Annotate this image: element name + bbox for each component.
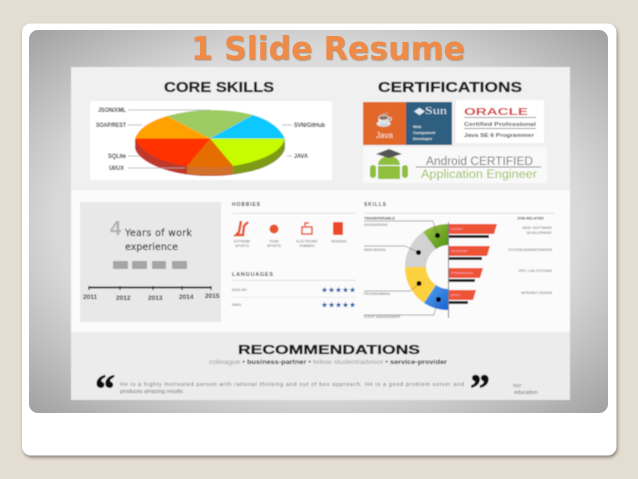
quote text: He is a highly motivated person with rational thinking and out of box approach. He is a good problem solver and bbox=[120, 382, 464, 388]
panel: experience bbox=[80, 202, 221, 322]
heading: skills: SKILLS bbox=[364, 202, 387, 208]
top section background bbox=[71, 67, 570, 190]
panel: skills: JOB-RELATED bbox=[517, 216, 544, 220]
badge: oracle: Certified Professional bbox=[464, 122, 537, 128]
bar chart: EXPERT bbox=[451, 227, 463, 231]
heading: languages: LANGUAGES bbox=[232, 272, 273, 278]
badge: android: Application Engineer bbox=[421, 169, 537, 181]
pie labels: SVN/GitHub bbox=[294, 123, 325, 129]
skill labels left: PROGRAMMING bbox=[364, 292, 391, 296]
heading: certifications: CERTIFICATIONS bbox=[378, 80, 522, 96]
quote text: produces amazing results. bbox=[120, 389, 185, 395]
attribution bbox=[513, 383, 538, 396]
pie labels: SQLite bbox=[108, 154, 127, 160]
bar chart: INTERMEDIATE bbox=[451, 271, 473, 275]
skill labels right: OPS / LAN SYSTEMS bbox=[518, 269, 553, 273]
pie labels: SOAP/REST bbox=[96, 123, 126, 129]
pie chart bbox=[135, 110, 285, 176]
hobby labels: EXTREME bbox=[234, 240, 251, 244]
timeline: 2011 bbox=[83, 294, 97, 301]
skill labels left: EVENT MANAGEMENT bbox=[364, 315, 400, 319]
badge: java: ☕ bbox=[376, 110, 393, 128]
skill labels left: ENGINEERING bbox=[364, 223, 388, 227]
timeline: 2014 bbox=[179, 294, 194, 301]
language rows: ★★★★★ bbox=[321, 300, 356, 310]
timeline: 2013 bbox=[148, 295, 163, 302]
heading: core skills: CORE SKILLS bbox=[164, 80, 274, 96]
badge: sun bbox=[406, 102, 452, 145]
badge: android bbox=[363, 147, 547, 183]
attribution: xyz bbox=[513, 383, 522, 389]
bar chart: ADVANCED bbox=[451, 249, 468, 253]
badge: oracle: ORACLE bbox=[464, 106, 528, 118]
grey title panel bbox=[29, 30, 608, 413]
hobby labels: TEAM bbox=[269, 240, 279, 244]
hobby labels: READING bbox=[331, 240, 347, 244]
hobby labels: ELECTRONIC bbox=[296, 240, 318, 244]
timeline: 2015 bbox=[205, 293, 220, 300]
icon: closing quote: ” bbox=[470, 366, 490, 411]
skill labels right: DEVELOPMENT bbox=[526, 231, 552, 235]
title: 1 Slide Resume bbox=[191, 30, 465, 68]
badge: java bbox=[363, 102, 406, 145]
donut chart bbox=[405, 222, 448, 318]
skill labels right: WEB / SOFTWARE bbox=[522, 226, 553, 230]
bar chart bbox=[449, 224, 497, 304]
experience text bbox=[110, 218, 192, 253]
timeline bbox=[83, 286, 220, 302]
language rows: HINDI bbox=[232, 303, 241, 307]
skill labels left bbox=[364, 223, 400, 319]
panel: certifications bbox=[363, 80, 547, 183]
badge: sun: Web bbox=[413, 124, 422, 129]
icon: opening quote: “ bbox=[95, 366, 115, 411]
badge: oracle bbox=[456, 100, 544, 143]
icon: reading bbox=[333, 222, 343, 235]
hobby labels: SPORTS bbox=[235, 244, 250, 248]
timeline: 2012 bbox=[116, 295, 131, 302]
skill labels right: SYSTEM ADMINISTRATION bbox=[509, 248, 553, 252]
panel: skills bbox=[364, 202, 554, 319]
badge: sun: Component bbox=[413, 130, 436, 135]
bar chart: BASIC bbox=[451, 293, 461, 297]
skill labels left: WEB DESIGN bbox=[364, 248, 386, 252]
hobby labels bbox=[234, 240, 347, 248]
skill labels right: INTRANET DESIGN bbox=[521, 291, 553, 295]
panel: hobbies bbox=[232, 202, 356, 310]
hobby labels: SPORTS bbox=[267, 244, 282, 248]
experience text: 4 bbox=[110, 218, 122, 240]
language rows: ★★★★★ bbox=[321, 286, 356, 294]
panel: core skills bbox=[90, 80, 332, 180]
recommendation types: colleague • business-partner • fellow student/advisor • service-provider bbox=[209, 359, 448, 366]
icon: android bbox=[370, 149, 408, 179]
experience text: Years of work bbox=[124, 228, 192, 239]
badge: java: Java bbox=[376, 131, 393, 140]
bottom section background bbox=[71, 332, 570, 400]
icons: briefcases bbox=[113, 261, 187, 269]
badge: android: Android CERTIFIED bbox=[426, 156, 533, 168]
pie labels: JSON/XML bbox=[98, 108, 126, 114]
badge: sun: ◆Sun bbox=[414, 106, 447, 117]
language rows bbox=[232, 286, 356, 310]
resume image bbox=[71, 67, 570, 411]
skill labels right bbox=[509, 226, 553, 295]
panel: skills: TRANSFERABLE bbox=[364, 216, 395, 220]
leader lines and dots bbox=[364, 221, 441, 315]
middle section background bbox=[71, 190, 570, 332]
icon: team sports bbox=[270, 224, 278, 234]
pie labels: JAVA bbox=[294, 154, 309, 160]
pie labels: UI/UX bbox=[109, 166, 124, 172]
heading: hobbies: HOBBIES bbox=[232, 202, 261, 208]
pie labels bbox=[96, 108, 325, 172]
badge: sun: Developer bbox=[413, 136, 433, 141]
quote text bbox=[120, 382, 464, 395]
language rows: ENGLISH bbox=[232, 288, 247, 292]
icon: electronic hobbies bbox=[302, 223, 312, 234]
heading: recommendations: RECOMMENDATIONS bbox=[238, 342, 420, 357]
icon: extreme sports bbox=[236, 221, 248, 235]
experience text: experience bbox=[125, 242, 178, 253]
attribution: education bbox=[514, 390, 538, 396]
chart card bbox=[90, 101, 332, 180]
panel: recommendations bbox=[95, 342, 538, 411]
hobby labels: HOBBIES bbox=[299, 244, 315, 248]
badge: oracle: Java SE 6 Programmer bbox=[464, 133, 535, 139]
